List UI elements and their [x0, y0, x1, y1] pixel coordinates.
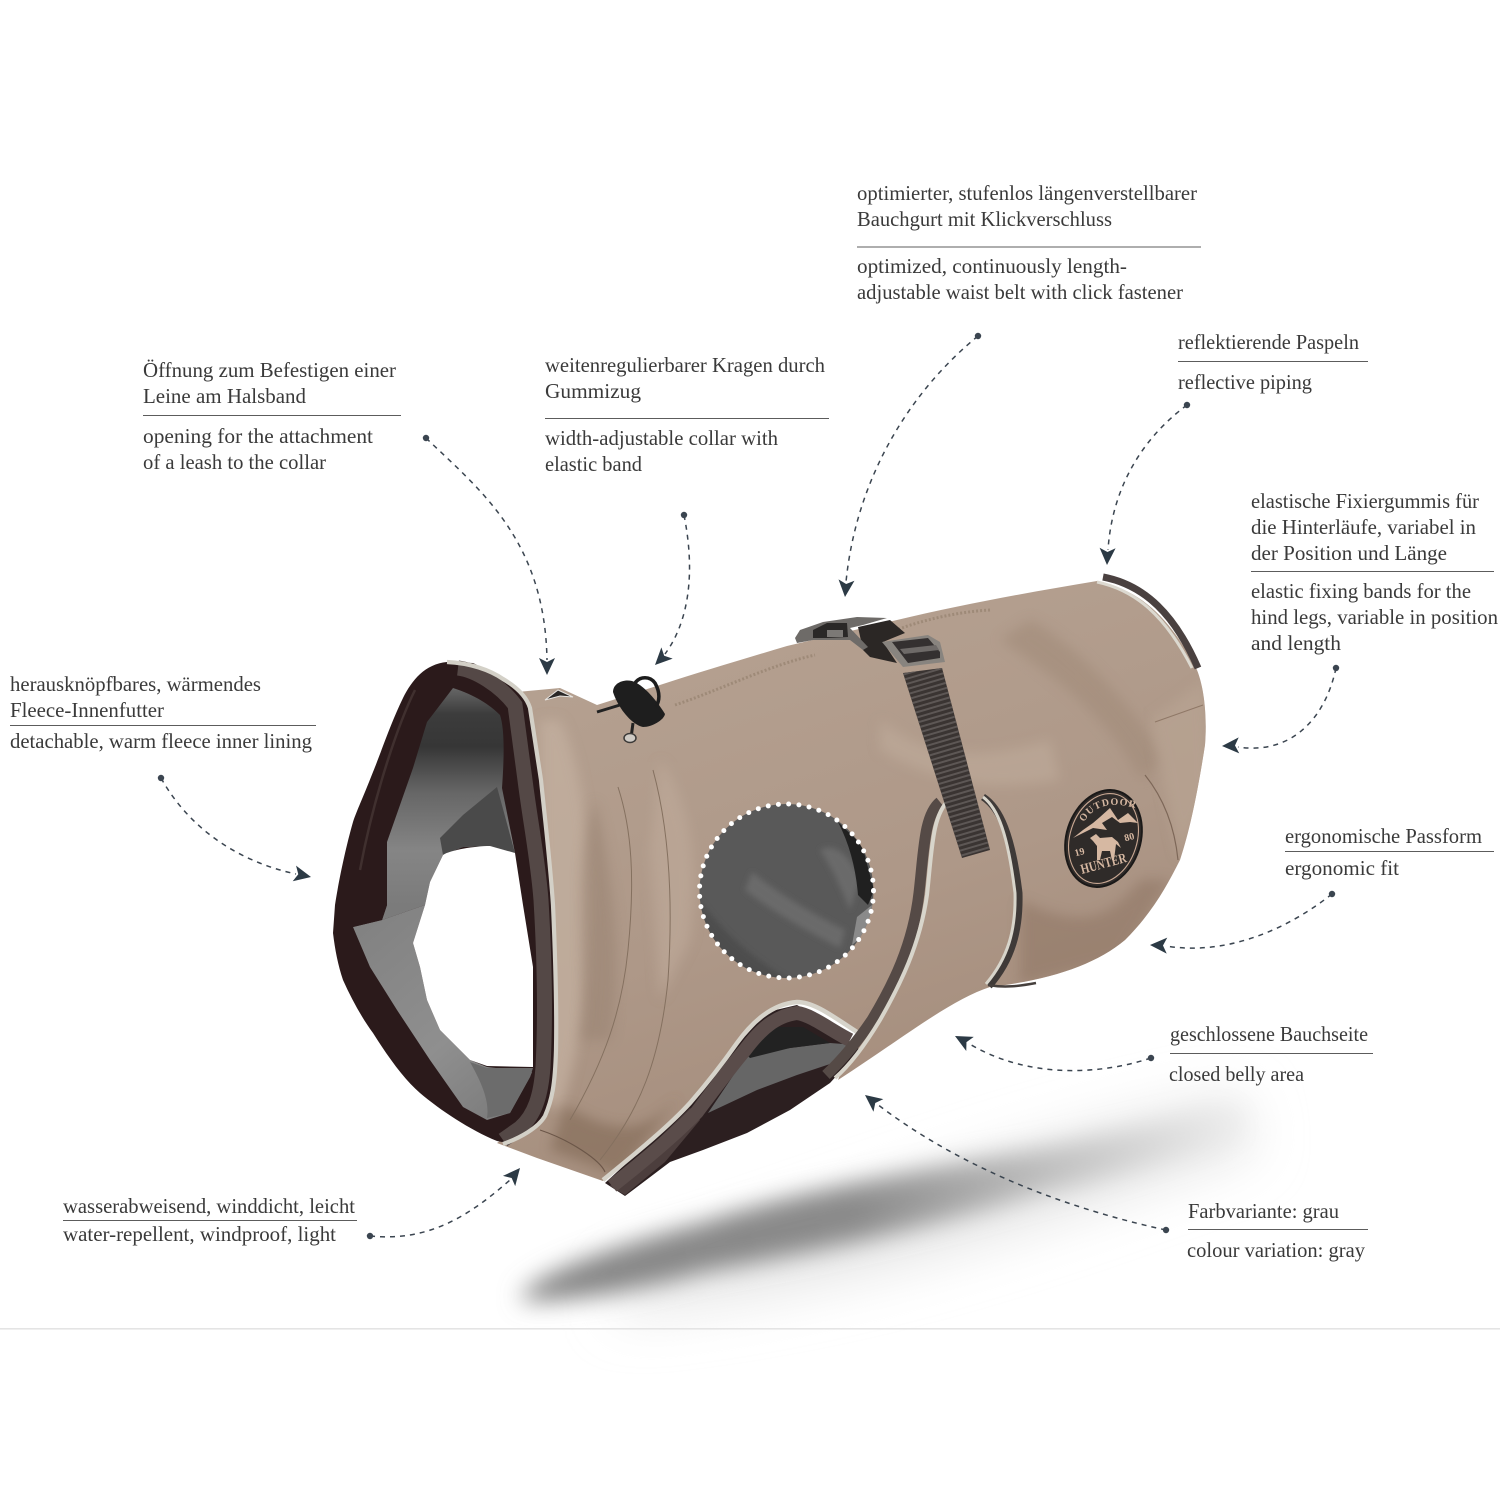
callout: fleece lining: herausknöpfbares, wärmendes [10, 672, 261, 696]
callout: water-repellent: water-repellent, windproof, light [63, 1222, 336, 1246]
arrow: closed belly [951, 1029, 1154, 1071]
callout: elastic bands: and length [1251, 631, 1342, 655]
callout: leash opening: opening for the attachment [143, 424, 373, 448]
callout: fleece lining: Fleece-Innenfutter [10, 698, 164, 722]
inset circle showing inner material [695, 804, 874, 985]
drawstring toggle [545, 678, 665, 742]
callout: elastic bands [1251, 489, 1498, 655]
callout: colour variation: colour variation: gray [1187, 1238, 1365, 1262]
Hunter badge: 80 [1123, 831, 1136, 844]
Hunter badge: HUNTER [1079, 851, 1129, 878]
callout: belly strap: optimierter, stufenlos längenverstellbarer [857, 181, 1197, 205]
callout: collar [545, 353, 829, 476]
callout: belly strap: Bauchgurt mit Klickverschluss [857, 207, 1112, 231]
callout: elastic bands: elastic fixing bands for the [1251, 579, 1471, 603]
callout: closed belly [1169, 1022, 1373, 1086]
fleece behind lower neck [470, 1062, 533, 1118]
fabric folds and shading [540, 610, 1210, 1175]
callout: water-repellent [63, 1194, 357, 1246]
dog coat product [333, 574, 1206, 1196]
Hunter badge: OUTDOOR [1080, 798, 1136, 821]
callout: leash opening: of a leash to the collar [143, 450, 326, 474]
separator line [0, 1328, 1500, 1330]
arrow: colour variation [860, 1089, 1169, 1233]
callout: collar: width-adjustable collar with [545, 426, 778, 450]
callout: ergonomic fit: ergonomische Passform [1285, 824, 1482, 848]
belt strap with buckle [795, 617, 990, 858]
callout: elastic bands: hind legs, variable in position [1251, 605, 1498, 629]
coat body shell [497, 581, 1206, 1181]
callout: elastic bands: die Hinterläufe, variabel in [1251, 515, 1476, 539]
collar fleece lining lower [353, 905, 532, 1120]
chest piping along front leg opening [603, 1002, 857, 1186]
callout: closed belly: geschlossene Bauchseite [1170, 1022, 1368, 1046]
callout: ergonomic fit: ergonomic fit [1285, 856, 1399, 880]
fleece inner fold [440, 787, 515, 855]
front leg opening lining [605, 1005, 860, 1196]
arrow: collar [649, 512, 690, 671]
arrow: leash opening [423, 435, 555, 675]
callout: colour variation [1187, 1199, 1368, 1262]
rear edge piping [1097, 577, 1198, 668]
callout: colour variation: Farbvariante: grau [1188, 1199, 1339, 1223]
callout: elastic bands: elastische Fixiergummis für [1251, 489, 1479, 513]
callout: leash opening: Öffnung zum Befestigen einer [143, 358, 396, 382]
arrow: belly strap [837, 333, 981, 598]
callout: belly strap: adjustable waist belt with click fastener [857, 280, 1183, 304]
collar rim outer band [333, 662, 557, 1143]
arrow: ergonomic fit [1150, 891, 1335, 954]
arrow: reflective piping [1099, 402, 1190, 565]
callout: elastic bands: der Position und Länge [1251, 541, 1447, 565]
Hunter badge [1064, 789, 1143, 888]
callout: collar: elastic band [545, 452, 642, 476]
collar piping [353, 662, 556, 1144]
callout: belly strap [857, 181, 1201, 304]
callout: collar: Gummizug [545, 379, 641, 403]
side piping front panel [826, 800, 949, 1078]
callout: ergonomic fit [1285, 824, 1494, 880]
Hunter badge: 19 [1073, 846, 1086, 859]
callout: fleece lining [10, 672, 316, 753]
callout: reflective piping: reflective piping [1178, 370, 1312, 394]
callout: reflective piping: reflektierende Paspeln [1178, 330, 1359, 354]
callout: closed belly: closed belly area [1169, 1062, 1305, 1086]
collar fleece lining upper [382, 688, 515, 920]
callout: reflective piping [1178, 330, 1368, 394]
arrow: water-repellent [367, 1163, 526, 1239]
callout: water-repellent: wasserabweisend, winddicht, leicht [63, 1194, 355, 1218]
infographic: dog coat features [0, 185, 1500, 1330]
callout: leash opening [143, 358, 401, 474]
side piping rear panel [983, 797, 1036, 986]
drop shadow under coat [520, 1095, 1255, 1315]
neck opening (white) [413, 846, 533, 1067]
callout: leash opening: Leine am Halsband [143, 384, 306, 408]
callout: belly strap: optimized, continuously length- [857, 254, 1127, 278]
callout: fleece lining: detachable, warm fleece inner lining [10, 729, 312, 753]
callout: collar: weitenregulierbarer Kragen durch [545, 353, 825, 377]
arrow: fleece lining [158, 775, 313, 885]
arrow: elastic bands [1222, 665, 1339, 754]
